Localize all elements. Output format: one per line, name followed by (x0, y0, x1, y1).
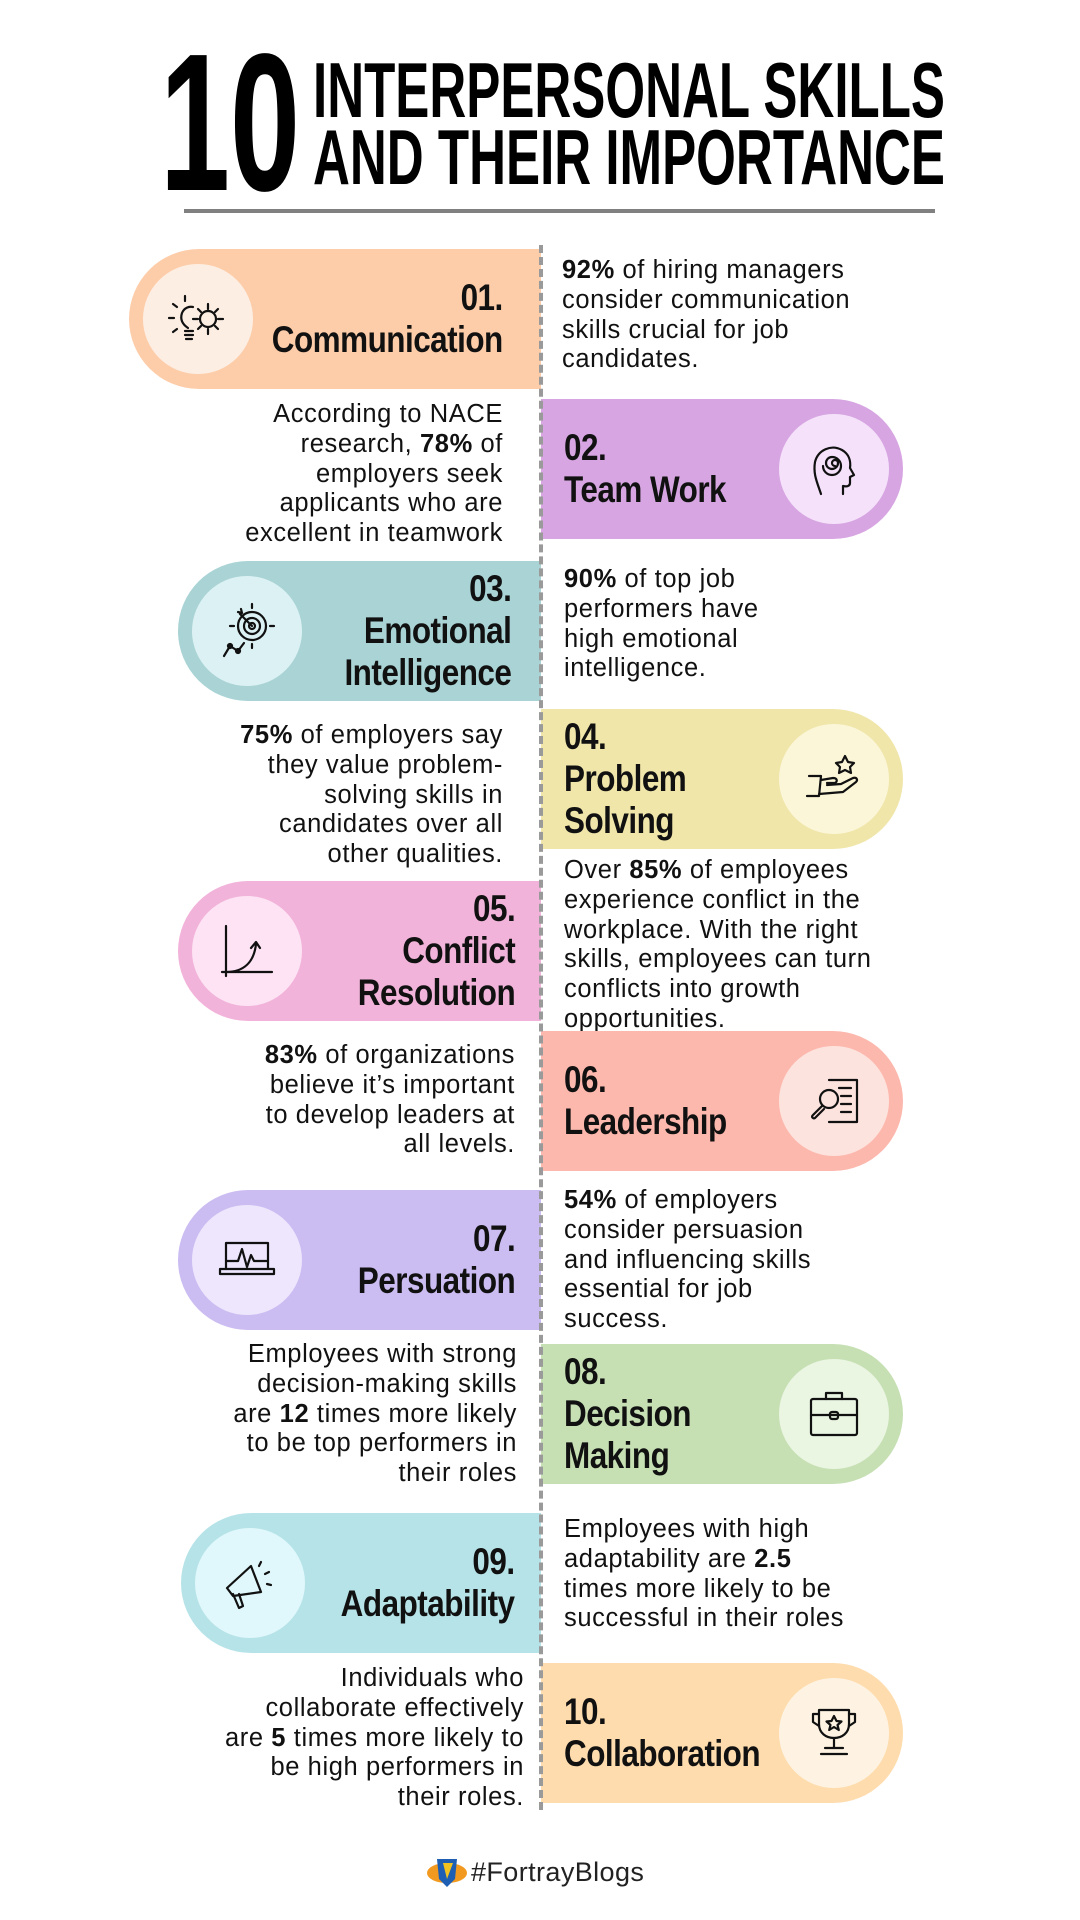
text: 08 stat: to be top performers in (247, 1429, 517, 1457)
text: 07 stat (564, 1186, 811, 1333)
text: 04 stat: they value problem- (268, 751, 503, 779)
text: 10 stat: are 5 times more likely to (225, 1724, 524, 1752)
text: 01 stat: candidates. (562, 345, 699, 373)
text: 01 stat: skills crucial for job (562, 316, 789, 344)
text: 09 stat: Employees with high (564, 1515, 809, 1543)
label: Conflict (402, 930, 515, 971)
icon: hand star (779, 724, 889, 834)
label: Resolution (358, 972, 515, 1013)
label: Emotional (364, 610, 511, 651)
text: 10 stat (225, 1664, 524, 1811)
text: 04 stat: 75% of employers say (240, 721, 503, 749)
text: 02 stat: applicants who are (280, 489, 503, 517)
label: 08. (564, 1351, 606, 1392)
text: 01 stat: consider communication (562, 286, 850, 314)
text: 07 stat: essential for job (564, 1275, 753, 1303)
label: Leadership (564, 1101, 727, 1142)
label: Communication (272, 319, 503, 360)
text: 09 stat: adaptability are 2.5 (564, 1545, 791, 1573)
text: 09 stat: times more likely to be (564, 1575, 831, 1603)
text: 02 stat: employers seek (316, 460, 503, 488)
text: 10 stat: Individuals who (341, 1664, 524, 1692)
icon: head (779, 414, 889, 524)
label (344, 568, 511, 693)
panel: 02 team work (541, 399, 903, 539)
label: Adaptability (341, 1583, 515, 1624)
text: 04 stat: solving skills in (324, 781, 503, 809)
text: 03 stat: performers have (564, 595, 759, 623)
label: 01. (461, 277, 503, 318)
label: Persuation (358, 1260, 515, 1301)
text: 03 stat: intelligence. (564, 654, 706, 682)
text: 02 stat: According to NACE (273, 400, 503, 428)
label: 02. (564, 427, 606, 468)
text: 07 stat: success. (564, 1305, 668, 1333)
text: 06 stat: 83% of organizations (265, 1041, 515, 1069)
text: 09 stat: successful in their roles (564, 1604, 844, 1632)
text: 03 stat (564, 565, 759, 682)
text: 07 stat: and influencing skills (564, 1246, 811, 1274)
text: 04 stat: candidates over all (279, 810, 503, 838)
label (564, 1351, 691, 1476)
label: 03. (469, 568, 511, 609)
label: Team Work (564, 469, 726, 510)
label: Problem (564, 758, 686, 799)
label: 09. (473, 1541, 515, 1582)
label (564, 1059, 727, 1142)
text: 06 stat: all levels. (404, 1130, 515, 1158)
panel: 10 collaboration (541, 1663, 903, 1803)
text: 08 stat: Employees with strong (248, 1340, 517, 1368)
label: Solving (564, 800, 674, 841)
icon: trophy (779, 1678, 889, 1788)
text: 05 stat: workplace. With the right (564, 916, 858, 944)
icon: target (192, 576, 302, 686)
text: 08 stat (233, 1340, 517, 1487)
text: 07 stat: 54% of employers (564, 1186, 778, 1214)
label (564, 427, 726, 510)
label (341, 1541, 515, 1624)
text: 10 stat: their roles. (398, 1783, 524, 1811)
text: 07 stat: consider persuasion (564, 1216, 804, 1244)
center dashed timeline (539, 245, 543, 1810)
text: 05 stat: experience conflict in the (564, 886, 860, 914)
text: 05 stat: opportunities. (564, 1005, 726, 1033)
footer brand (427, 1856, 644, 1887)
label: Making (564, 1435, 669, 1476)
text: 05 stat (564, 856, 872, 1033)
label: 06. (564, 1059, 606, 1100)
icon: laptop pulse (192, 1205, 302, 1315)
text: 04 stat (240, 721, 503, 868)
text: 05 stat: conflicts into growth (564, 975, 801, 1003)
label (358, 1218, 515, 1301)
panel: 01 communication (129, 249, 541, 389)
text: 10 stat: collaborate effectively (265, 1694, 524, 1722)
label (564, 1691, 760, 1774)
icon: bulb gear (143, 264, 253, 374)
text: 03 stat: 90% of top job (564, 565, 735, 593)
text: 01 stat: 92% of hiring managers (562, 256, 845, 284)
label (358, 888, 516, 1013)
text: 09 stat (564, 1515, 844, 1632)
text: 08 stat: their roles (398, 1459, 517, 1487)
label (564, 716, 686, 841)
text: 02 stat: research, 78% of (301, 430, 503, 458)
text: 10 stat: be high performers in (270, 1753, 524, 1781)
label (272, 277, 503, 360)
text: 05 stat: Over 85% of employees (564, 856, 849, 884)
icon: briefcase (779, 1359, 889, 1469)
text: 06 stat: believe it’s important (270, 1071, 515, 1099)
label: 10. (564, 1691, 606, 1732)
brand text: #FortrayBlogs (471, 1856, 644, 1886)
label: 07. (473, 1218, 515, 1259)
text: 08 stat: decision-making skills (257, 1370, 517, 1398)
icon: logo shield (427, 1859, 467, 1887)
text: 03 stat: high emotional (564, 625, 738, 653)
label: Decision (564, 1393, 691, 1434)
text: 05 stat: skills, employees can turn (564, 945, 872, 973)
text: 04 stat: other qualities. (328, 840, 503, 868)
label: Collaboration (564, 1733, 760, 1774)
text: 02 stat: excellent in teamwork (245, 519, 503, 547)
title (160, 13, 945, 200)
icon: megaphone (195, 1528, 305, 1638)
text: 08 stat: are 12 times more likely (233, 1400, 517, 1428)
icon: growth chart (192, 896, 302, 1006)
panel: 07 persuation (178, 1190, 541, 1330)
panel: 06 leadership (541, 1031, 903, 1171)
text: 06 stat: to develop leaders at (266, 1101, 515, 1129)
text: 02 stat (245, 400, 503, 547)
label: 04. (564, 716, 606, 757)
panel: 09 adaptability (181, 1513, 541, 1653)
panel: 04 problem solving (541, 709, 903, 849)
label: Intelligence (344, 652, 511, 693)
panel: 08 decision making (541, 1344, 903, 1484)
label: 05. (473, 888, 515, 929)
panel: 05 conflict resolution (178, 881, 541, 1021)
text: 06 stat (265, 1041, 515, 1158)
panel: 03 emotional intelligence (178, 561, 541, 701)
icon: search document (779, 1046, 889, 1156)
text: 01 stat (562, 256, 850, 373)
